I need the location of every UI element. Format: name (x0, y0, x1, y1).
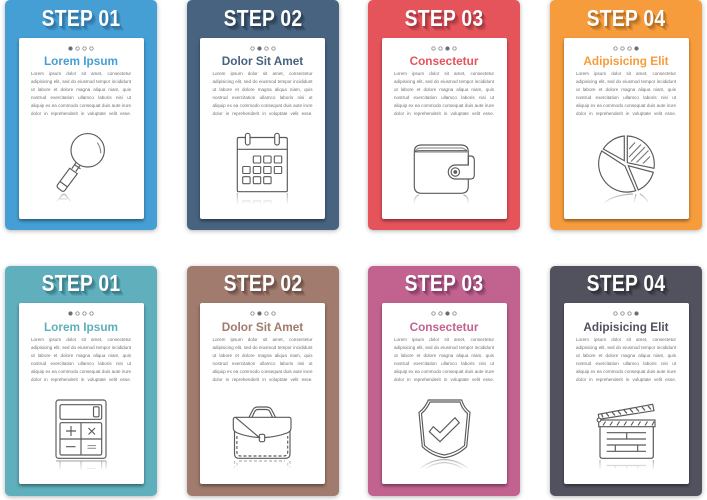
text block: nostrud exercitation ullamco laboris nisi ut (576, 95, 676, 100)
text block (212, 71, 312, 116)
title: Dolor Sit Amet (222, 54, 303, 68)
heading: step 01: STEP 01 (42, 4, 120, 30)
panel: step 01 teal (5, 266, 157, 496)
text block: Lorem ipsum dolor sit amet, consectetur (576, 336, 676, 342)
text block (576, 71, 676, 116)
progress dots (250, 311, 276, 316)
text block (31, 336, 131, 382)
text block: ut labore et dolore magna aliqua niam, quis (576, 352, 676, 358)
title: Consectetur (410, 320, 478, 334)
icon: clapperboard (596, 404, 656, 469)
icon: wallet (414, 144, 475, 203)
title: Lorem Ipsum (44, 320, 118, 334)
text block: Lorem ipsum dolor sit amet, consectetur (394, 336, 494, 342)
progress dots (614, 46, 639, 51)
text block: ut labore et dolore magna aliqua niam, quis (212, 352, 312, 358)
white content panel (18, 303, 144, 484)
text block: nostrud exercitation ullamco laboris nisi ut (31, 95, 131, 100)
heading: step 02: STEP 02 (223, 270, 302, 296)
text block: ut labore et dolore magna aliqua niam, quis (31, 352, 131, 358)
title: Adipisicing Elit (583, 54, 669, 68)
text block: dolor in reprehenderit in voluptate velit esse. (212, 376, 312, 382)
text block: adipisicing elit, sed do eiusmod tempor incididunt (394, 79, 494, 84)
text block: nostrud exercitation ullamco laboris nisi ut (576, 360, 676, 366)
text block: aliquip ex ea commodo consequat duis aute irure (212, 368, 312, 374)
heading: step 03: STEP 03 (405, 270, 483, 296)
progress dots (68, 311, 94, 316)
icon: calculator (55, 399, 107, 470)
panel: step 02 brown (186, 266, 338, 496)
heading: step 04: STEP 04 (587, 270, 665, 296)
heading: step 04: STEP 04 (587, 4, 665, 30)
icon: pie chart (598, 135, 655, 203)
text block: aliquip ex ea commodo consequat duis aute irure (394, 368, 494, 374)
progress dots (250, 46, 276, 51)
heading: step 03: STEP 03 (405, 4, 483, 30)
text block: adipisicing elit, sed do eiusmod tempor incididunt (576, 79, 676, 84)
panel: step 04 orange (550, 0, 702, 230)
title: Lorem Ipsum (44, 54, 118, 68)
white content panel (200, 303, 325, 484)
text block: nostrud exercitation ullamco laboris nisi ut (31, 360, 131, 366)
text block: Lorem ipsum dolor sit amet, consectetur (576, 71, 676, 76)
text block: adipisicing elit, sed do eiusmod tempor incididunt (212, 344, 312, 350)
title: Dolor Sit Amet (222, 320, 303, 334)
text block: aliquip ex ea commodo consequat duis aute irure (31, 368, 131, 374)
text block: dolor in reprehenderit in voluptate velit esse. (394, 111, 494, 116)
panel: step 03 red (368, 0, 520, 230)
text block: aliquip ex ea commodo consequat duis aute irure (576, 368, 676, 374)
panel: step 04 charcoal (550, 266, 702, 496)
text block (576, 336, 676, 382)
panel: step 03 pink (368, 266, 520, 496)
white content panel (564, 303, 688, 484)
panel: step 01 blue (5, 0, 157, 230)
text block: ut labore et dolore magna aliqua niam, quis (31, 87, 131, 92)
text block: adipisicing elit, sed do eiusmod tempor incididunt (31, 79, 131, 84)
text block: aliquip ex ea commodo consequat duis aute irure (394, 103, 494, 108)
text block: adipisicing elit, sed do eiusmod tempor incididunt (212, 79, 312, 84)
text block: adipisicing elit, sed do eiusmod tempor incididunt (394, 344, 494, 350)
text block: dolor in reprehenderit in voluptate velit esse. (212, 111, 312, 116)
text block: Lorem ipsum dolor sit amet, consectetur (212, 336, 312, 342)
white content panel (18, 38, 144, 218)
white content panel (382, 38, 506, 218)
text block: dolor in reprehenderit in voluptate velit esse. (394, 376, 494, 382)
panel: step 02 navy (186, 0, 338, 230)
text block: aliquip ex ea commodo consequat duis aute irure (212, 103, 312, 108)
text block: ut labore et dolore magna aliqua niam, quis (394, 87, 494, 92)
title: Adipisicing Elit (583, 320, 669, 334)
text block (212, 336, 312, 382)
text block (31, 71, 131, 116)
text block: nostrud exercitation ullamco laboris nisi ut (212, 360, 312, 366)
text block: Lorem ipsum dolor sit amet, consectetur (212, 71, 312, 76)
text block: adipisicing elit, sed do eiusmod tempor incididunt (31, 344, 131, 350)
icon: briefcase (232, 406, 292, 469)
text block: dolor in reprehenderit in voluptate velit esse. (31, 376, 131, 382)
white content panel (382, 303, 506, 484)
white content panel (200, 38, 325, 218)
text block: adipisicing elit, sed do eiusmod tempor incididunt (576, 344, 676, 350)
progress dots (68, 46, 94, 51)
text block: aliquip ex ea commodo consequat duis aute irure (31, 103, 131, 108)
text block: nostrud exercitation ullamco laboris nisi ut (212, 95, 312, 100)
text block: Lorem ipsum dolor sit amet, consectetur (31, 336, 131, 342)
text block: ut labore et dolore magna aliqua niam, quis (394, 352, 494, 358)
heading: step 02: STEP 02 (223, 4, 302, 30)
text block: dolor in reprehenderit in voluptate velit esse. (576, 376, 676, 382)
progress dots (432, 311, 456, 316)
text block (394, 71, 494, 116)
text block: dolor in reprehenderit in voluptate velit esse. (31, 111, 131, 116)
text block: ut labore et dolore magna aliqua niam, quis (576, 87, 676, 92)
progress dots (432, 46, 456, 51)
text block (394, 336, 494, 382)
icon: calendar (236, 132, 288, 204)
text block: nostrud exercitation ullamco laboris nisi ut (394, 360, 494, 366)
text block: Lorem ipsum dolor sit amet, consectetur (31, 71, 131, 76)
text block: nostrud exercitation ullamco laboris nisi ut (394, 95, 494, 100)
text block: ut labore et dolore magna aliqua niam, quis (212, 87, 312, 92)
progress dots (614, 311, 639, 316)
white content panel (564, 38, 688, 218)
heading: step 01: STEP 01 (42, 270, 120, 296)
text block: Lorem ipsum dolor sit amet, consectetur (394, 71, 494, 76)
icon: magnifying glass (56, 133, 105, 202)
text block: aliquip ex ea commodo consequat duis aute irure (576, 103, 676, 108)
title: Consectetur (410, 54, 478, 68)
icon: shield with check mark (418, 399, 471, 469)
text block: dolor in reprehenderit in voluptate velit esse. (576, 111, 676, 116)
